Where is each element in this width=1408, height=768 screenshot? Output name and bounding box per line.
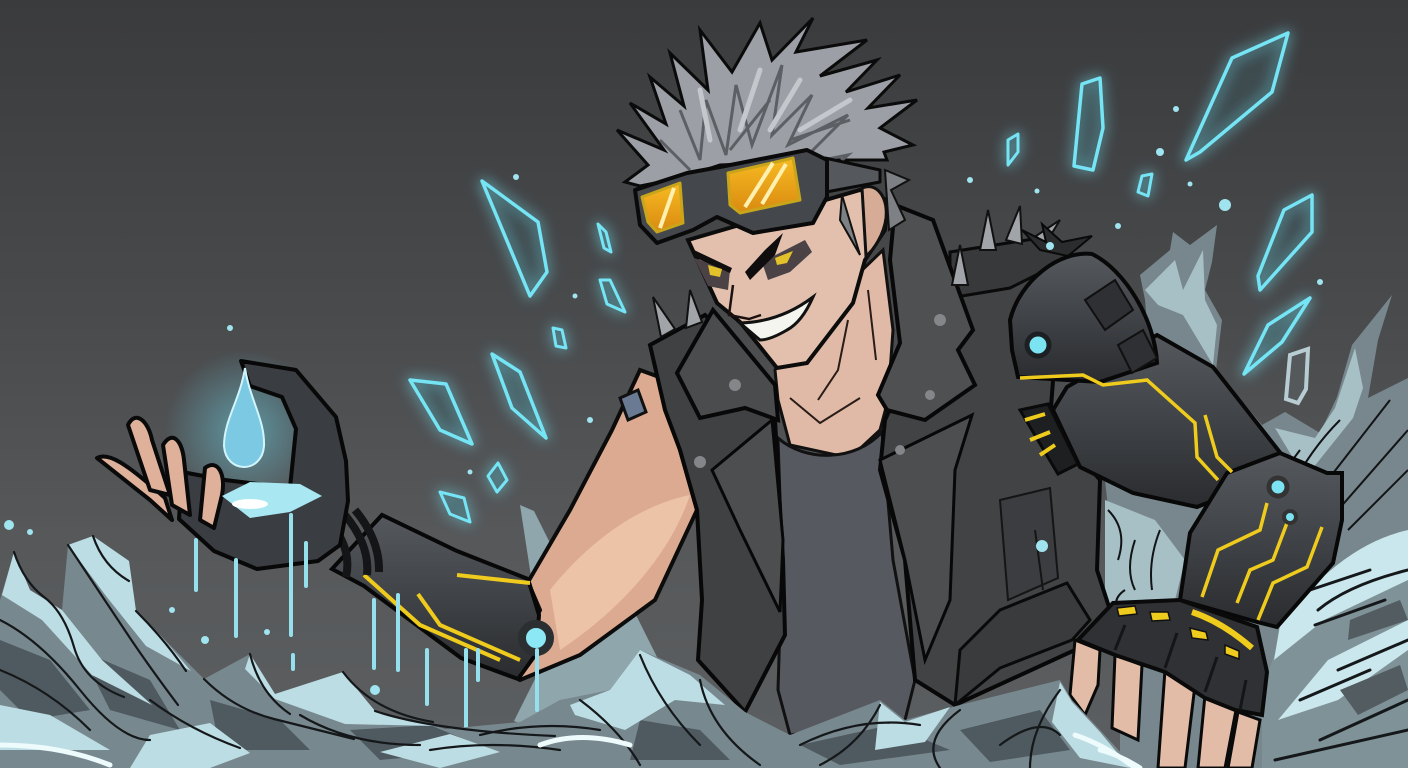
finger four: [1198, 695, 1236, 768]
crystal small 4: [488, 463, 507, 492]
mouth: [740, 297, 813, 340]
finger little: [97, 456, 172, 520]
sleeve cuff: [955, 583, 1090, 705]
drips: [196, 515, 537, 750]
crystal small 5: [440, 492, 470, 522]
palm energy disc: [222, 482, 322, 518]
finger one: [1070, 640, 1100, 715]
head: [688, 170, 909, 368]
crystal top centre: [1074, 78, 1103, 170]
water body: [0, 536, 1135, 768]
neck lines: [790, 290, 876, 423]
hand with water drop: [97, 350, 537, 750]
wrist rings: [332, 510, 379, 577]
crystal small 3: [553, 328, 566, 348]
ear: [862, 187, 886, 256]
yellow circuit lines: [1020, 375, 1322, 620]
collar right: [878, 205, 975, 420]
shoulder panels: [1085, 280, 1157, 373]
crystal small 2: [600, 280, 625, 312]
finger index: [200, 465, 223, 528]
crystal small 7: [1138, 174, 1152, 196]
yellow cables: [1020, 404, 1078, 474]
forearm: [1180, 453, 1342, 627]
arm highlight: [550, 495, 690, 650]
muscular arm: [495, 370, 697, 680]
crystal left tall: [482, 181, 547, 296]
water droplets: [4, 106, 1323, 695]
floating crystals: [410, 33, 1312, 522]
cybernetic forearm left: [332, 510, 550, 679]
eye right: [762, 240, 812, 280]
crystal top right large: [1186, 33, 1288, 160]
lens right: [728, 158, 800, 213]
goggles: [635, 150, 880, 243]
tattoo: [620, 390, 646, 420]
white spray: [0, 735, 1140, 768]
water drop: [224, 368, 264, 467]
cybernetic right arm: [1010, 254, 1342, 627]
neck and chest: [775, 250, 893, 458]
leather vest right: [878, 205, 1110, 705]
crystal small 1: [598, 224, 611, 252]
strap across shoulder: [950, 238, 1070, 298]
foreground water: [0, 536, 1140, 768]
lens left: [642, 183, 683, 232]
hair shading: [660, 65, 850, 190]
ghost water shard: [1286, 349, 1308, 403]
back water splash right: [1105, 225, 1408, 768]
lapel right: [880, 415, 972, 660]
eye left: [694, 258, 730, 290]
wave ink lines: [0, 536, 1060, 768]
lens glare: [660, 163, 786, 228]
finger five: [1228, 712, 1260, 768]
lapel left: [712, 420, 783, 612]
yellow lines: [364, 575, 530, 660]
finger three: [1158, 670, 1195, 768]
side hair: [840, 170, 909, 255]
glove: [1078, 600, 1267, 715]
strap: [825, 158, 880, 192]
crystal right middle: [1258, 195, 1312, 290]
finger middle: [163, 438, 190, 515]
nose: [729, 285, 761, 319]
crystal mid: [492, 354, 546, 438]
joint lights: [1027, 334, 1049, 356]
crystal lower left: [410, 380, 472, 444]
right hand: [1070, 600, 1267, 768]
shirt: [778, 432, 915, 735]
brow: [694, 233, 783, 280]
leather vest left: [650, 290, 785, 712]
spikes right: [952, 206, 1060, 285]
crystal small 6: [1008, 134, 1018, 165]
metal thumb and palm: [179, 361, 348, 569]
finger ring: [128, 418, 170, 495]
collar left: [677, 310, 778, 420]
spikes left: [653, 290, 702, 337]
crystal right lower: [1244, 298, 1310, 374]
pocket: [1000, 488, 1058, 600]
finger two: [1112, 655, 1142, 740]
splash behind left arm: [514, 505, 714, 761]
light foam streaks: [0, 536, 1130, 768]
elbow joint: [522, 624, 550, 652]
dark water patches: [0, 640, 1070, 765]
upper arm outer: [1053, 335, 1282, 507]
hair: [617, 18, 917, 190]
shoulder: [1010, 254, 1157, 382]
